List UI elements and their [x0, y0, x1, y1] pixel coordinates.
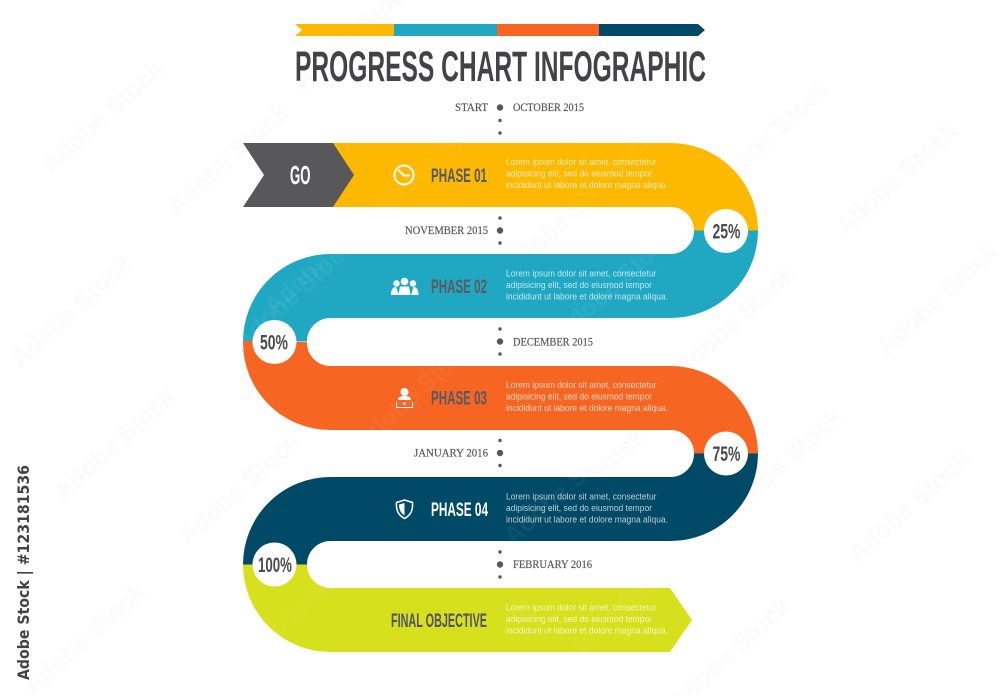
top colour arrow bar	[295, 24, 705, 36]
text: phase 02 description: incididunt ut labore et dolore magna aliqua.	[506, 292, 668, 302]
watermark pattern over bands: Adobe Stock	[259, 197, 391, 321]
text: phase 04 description: incididunt ut labore et dolore magna aliqua.	[506, 514, 668, 524]
winding progress road	[275, 175, 726, 620]
date: January 2016: JANUARY 2016	[414, 448, 488, 460]
date: December 2015	[497, 327, 593, 356]
watermark pattern over bands: Adobe Stock	[349, 332, 481, 456]
heading: phase 04: PHASE 04	[431, 500, 488, 521]
heading: final objective: FINAL OBJECTIVE	[391, 611, 487, 632]
text: phase 01 description: adipisicing elit, sed do eiusmod tempor	[506, 168, 652, 178]
watermark pattern on background: Adobe Stock	[6, 249, 138, 373]
watermark pattern on background: Adobe Stock	[519, 422, 651, 546]
heading: phase 01: PHASE 01	[431, 166, 487, 187]
watermark pattern over bands: Adobe Stock	[369, 97, 501, 221]
heading: phase 03: PHASE 03	[431, 388, 487, 410]
icon: people group	[391, 278, 418, 295]
watermark pattern on background: Adobe Stock	[704, 74, 836, 198]
watermark pattern on background: Adobe Stock	[174, 427, 306, 551]
timeline dates and dots	[405, 102, 593, 579]
text: phase 02 description: Lorem ipsum dolor sit amet, consectetur	[506, 268, 656, 278]
watermark pattern on background: Adobe Stock	[162, 97, 294, 221]
date: January 2016	[414, 439, 503, 467]
icon: shield	[396, 500, 413, 518]
date: February 2016: FEBRUARY 2016	[513, 559, 592, 571]
date: start October 2015: START	[455, 102, 488, 114]
text: final objective description: Lorem ipsum dolor sit amet, consectetur	[506, 602, 656, 612]
watermark pattern over bands: Adobe Stock	[499, 427, 631, 551]
go arrow	[243, 143, 354, 207]
date: November 2015: NOVEMBER 2015	[405, 225, 488, 237]
text: phase 04 description: Lorem ipsum dolor sit amet, consectetur	[506, 492, 656, 502]
text: phase 03 description: incididunt ut labore et dolore magna aliqua.	[506, 403, 668, 413]
watermark pattern on background: Adobe Stock	[872, 237, 1000, 361]
final objective content	[391, 602, 668, 636]
watermark pattern on background: Adobe Stock	[499, 157, 631, 281]
icon: clock	[394, 166, 414, 184]
phase 02 content	[391, 268, 668, 302]
go arrow: GO	[290, 160, 310, 190]
watermark pattern over bands: Adobe Stock	[229, 232, 361, 356]
text: phase 03 description	[506, 380, 668, 413]
road segment: final objective lime	[275, 564, 660, 620]
date: December 2015: DECEMBER 2015	[513, 336, 593, 348]
watermark pattern over bands	[229, 97, 681, 676]
progress badge: 75%: 75%	[712, 443, 741, 466]
final objective arrow head	[660, 588, 692, 652]
progress badge: 75%	[704, 432, 748, 476]
road segment: phase 03 orange	[275, 342, 726, 454]
phase 03 content	[396, 380, 668, 413]
watermark pattern on background: Adobe Stock	[716, 402, 848, 526]
road segment: phase 01 yellow	[320, 175, 726, 230]
text: phase 04 description	[506, 492, 668, 524]
text: final objective description	[506, 602, 668, 636]
watermark pattern on background: Adobe Stock	[831, 117, 963, 241]
text: phase 02 description	[506, 268, 668, 302]
text: phase 01 description	[506, 157, 668, 190]
side credit text: Adobe Stock | #123181536	[14, 465, 34, 680]
text: phase 01 description: incididunt ut labore et dolore magna aliqua.	[506, 180, 668, 190]
watermark pattern over bands: Adobe Stock	[239, 542, 371, 666]
date: start October 2015: OCTOBER 2015	[513, 102, 584, 114]
watermark pattern on background: Adobe Stock	[37, 55, 169, 179]
watermark pattern over bands: Adobe Stock	[529, 122, 661, 246]
title: PROGRESS CHART INFOGRAPHIC	[295, 43, 706, 91]
heading: phase 02: PHASE 02	[431, 277, 487, 298]
road segment: phase 02 blue	[275, 230, 726, 342]
phase 04 content	[396, 492, 668, 524]
road segment: phase 04 navy	[275, 454, 726, 564]
watermark pattern over bands: Adobe Stock	[549, 552, 681, 676]
watermark pattern on background: Adobe Stock	[669, 259, 801, 383]
progress badge: 100%: 100%	[258, 554, 292, 577]
text: phase 01 description: Lorem ipsum dolor sit amet, consectetur	[506, 157, 656, 167]
text: final objective description: adipisicing elit, sed do eiusmod tempor	[506, 614, 652, 624]
phase 01 content	[394, 157, 668, 190]
date: start October 2015	[455, 102, 584, 135]
watermark pattern on background: Adobe Stock	[843, 445, 975, 569]
text: final objective description: incididunt ut labore et dolore magna aliqua.	[506, 626, 668, 636]
text: phase 03 description: adipisicing elit, sed do eiusmod tempor	[506, 392, 652, 402]
date: November 2015	[405, 216, 503, 245]
watermark pattern over bands: Adobe Stock	[549, 222, 681, 346]
progress badge: 50%: 50%	[260, 332, 288, 354]
text: phase 04 description: adipisicing elit, sed do eiusmod tempor	[506, 503, 652, 513]
text: phase 02 description: adipisicing elit, sed do eiusmod tempor	[506, 280, 652, 290]
watermark pattern on background: Adobe Stock	[49, 382, 181, 506]
progress badge: 50%	[252, 320, 296, 364]
progress badge: 100%	[252, 542, 296, 586]
icon: person at laptop	[396, 388, 412, 408]
progress badge: 25%: 25%	[712, 220, 741, 244]
text: phase 03 description: Lorem ipsum dolor sit amet, consectetur	[506, 380, 656, 390]
date: February 2016	[497, 550, 592, 579]
progress badge: 25%	[704, 209, 748, 253]
